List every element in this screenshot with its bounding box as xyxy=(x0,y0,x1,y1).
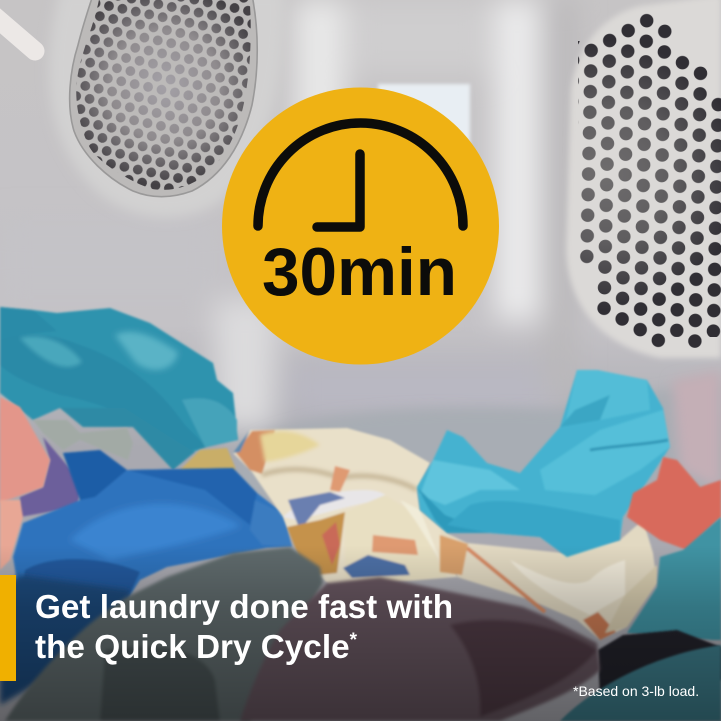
striped towel centre xyxy=(233,428,457,585)
coral cloth xyxy=(627,457,721,550)
pink cloth xyxy=(0,397,50,503)
mauve sweater xyxy=(240,577,600,721)
teal cloth left xyxy=(0,307,238,470)
cream towel right xyxy=(440,520,657,640)
badge: 30 minute clock xyxy=(222,88,499,364)
badge label: 30min xyxy=(262,235,457,310)
left vent recess xyxy=(49,0,285,218)
dark cloth xyxy=(598,630,721,700)
yellow cloth xyxy=(180,448,235,472)
right vent panel xyxy=(566,0,721,358)
teal cloth right xyxy=(417,370,670,557)
dark blue lower left xyxy=(0,575,130,705)
purple cloth xyxy=(20,437,82,517)
accent bar xyxy=(0,575,16,681)
badge circle xyxy=(222,88,499,364)
laundry pile xyxy=(0,307,721,721)
left vent perforated dots xyxy=(76,0,251,190)
headline: Get laundry done fast with xyxy=(35,589,453,626)
drum light bands and window glow xyxy=(0,0,575,430)
headline second line: the Quick Dry Cycle xyxy=(35,629,350,666)
bottom darkening overlay xyxy=(0,545,721,721)
pink tint right wall xyxy=(672,370,721,490)
footnote: *Based on 3-lb load. xyxy=(573,683,699,699)
blue shirt xyxy=(13,450,292,600)
grey sweatshirt xyxy=(5,547,323,721)
headline second line: * xyxy=(350,630,358,651)
right vent perforated dots xyxy=(578,14,721,348)
white rod xyxy=(0,14,35,51)
mist behind pile xyxy=(236,380,721,500)
teal cloth far right xyxy=(627,517,721,640)
icon: half clock dial xyxy=(258,123,463,227)
grey cloth xyxy=(33,420,133,460)
window glow xyxy=(378,84,470,154)
teal cloth lower right xyxy=(560,645,721,721)
